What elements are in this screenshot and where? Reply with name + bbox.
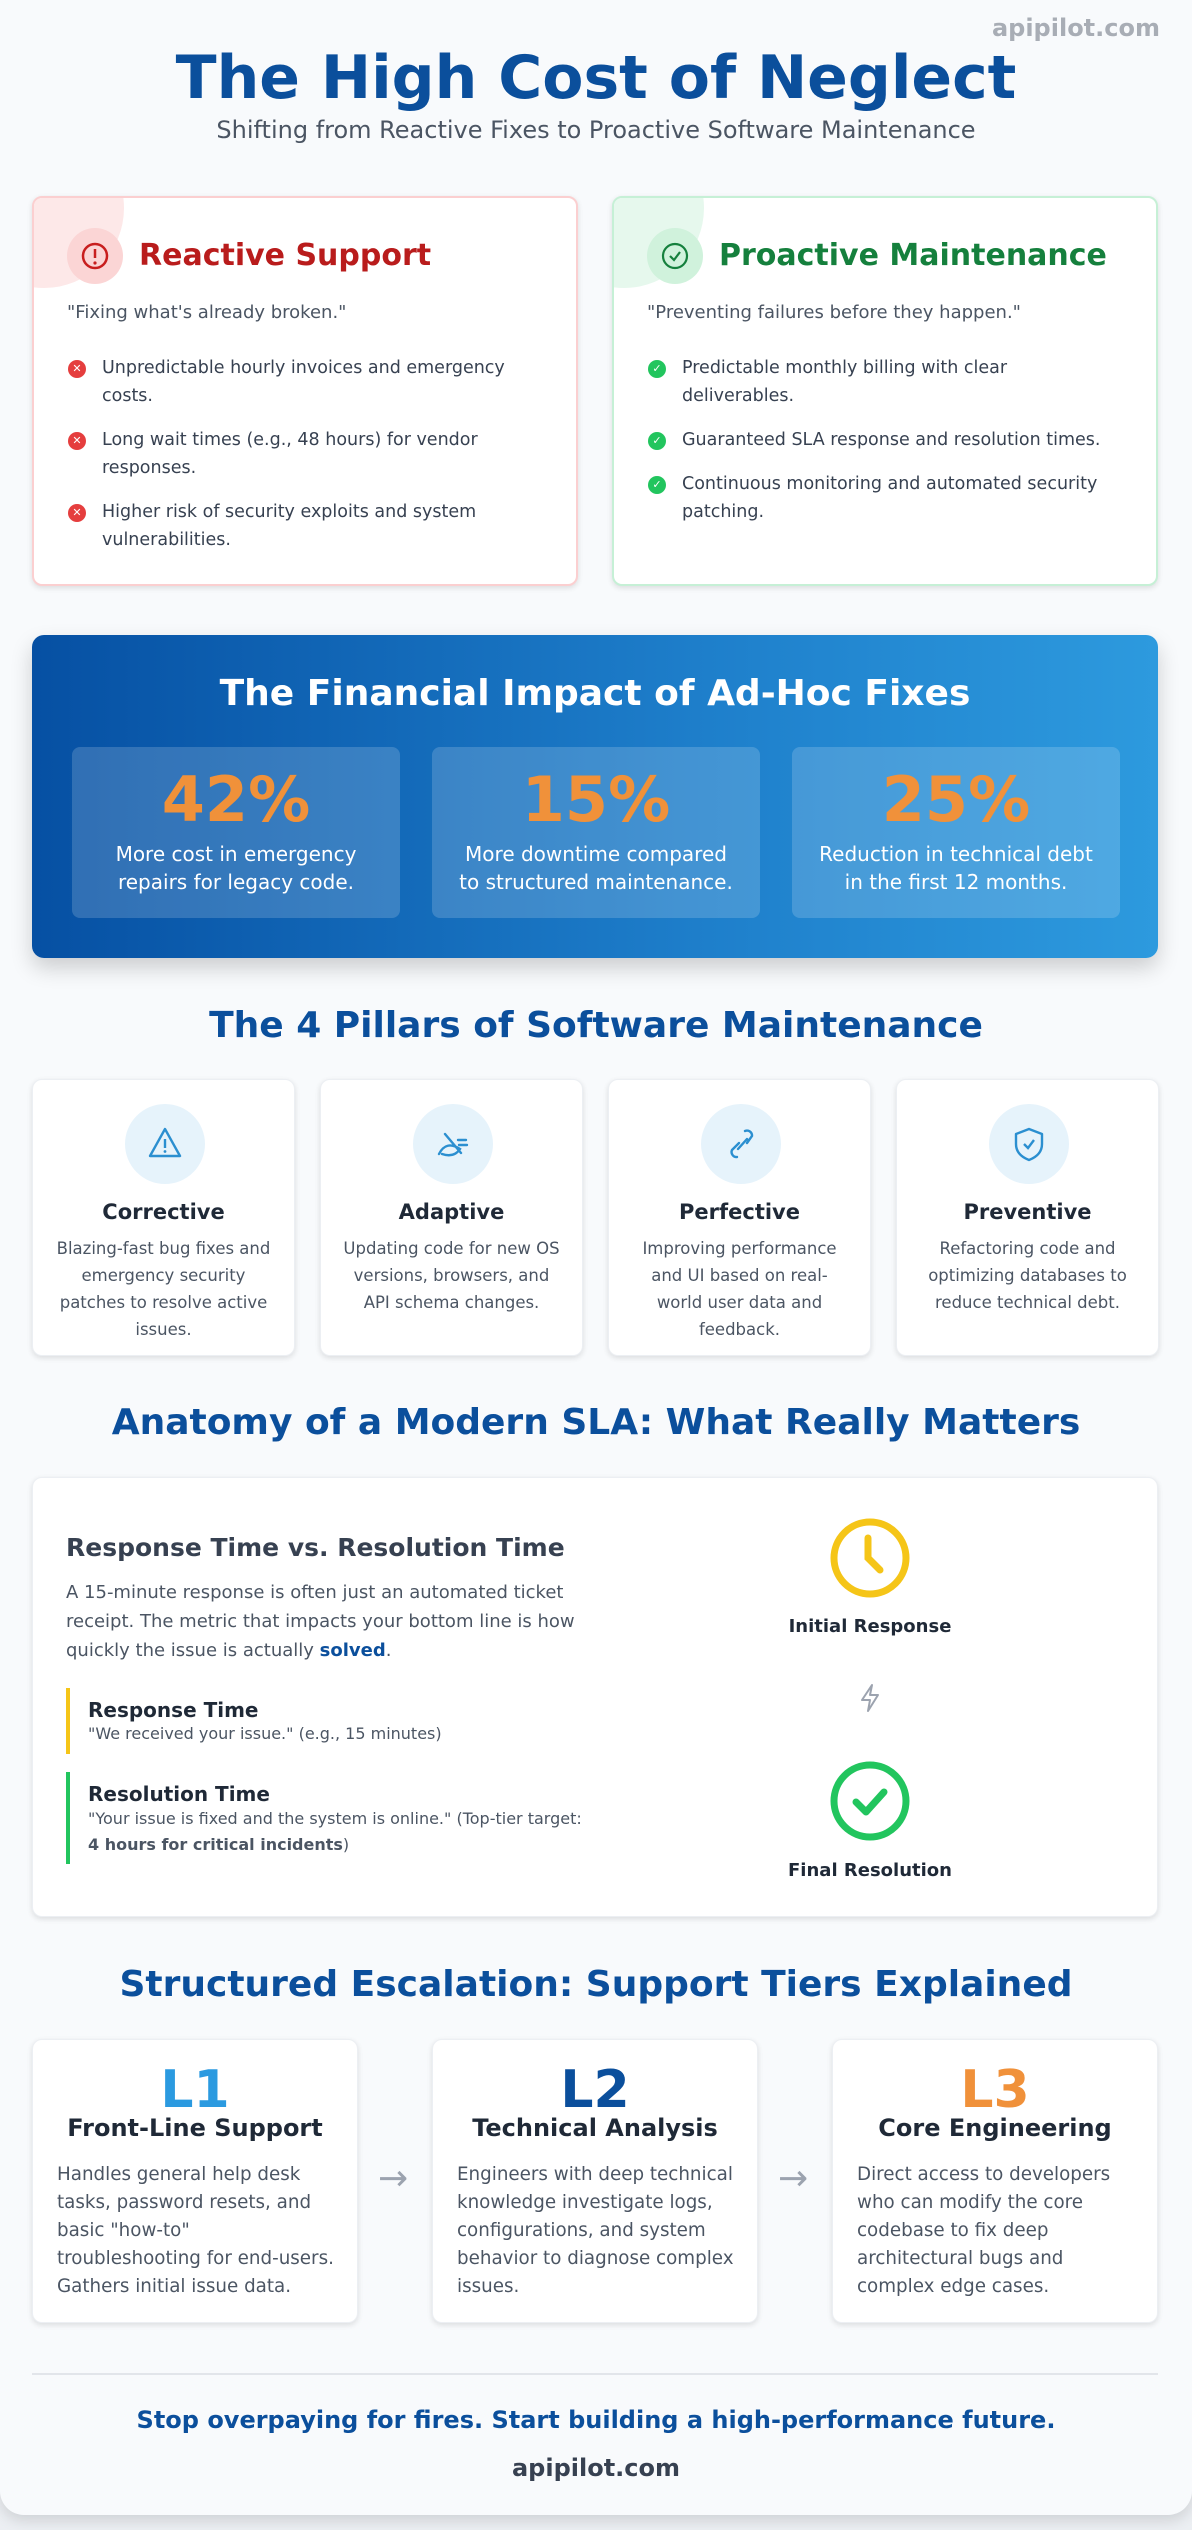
quote: "Preventing failures before they happen." xyxy=(647,302,1021,323)
stat: 15%: 15% xyxy=(522,763,670,836)
stat: 15% xyxy=(432,747,760,918)
stat: 42%: repairs for legacy code. xyxy=(118,870,354,894)
item: resolution time: "Your issue is fixed and the system is online." (Top-tier target: 4 hours for critical incidents) xyxy=(88,1809,582,1854)
pillar: preventive xyxy=(896,1079,1159,1356)
icon: check circle xyxy=(830,1762,910,1840)
item: resolution time xyxy=(66,1772,596,1864)
heading: The Financial Impact of Ad-Hoc Fixes xyxy=(220,673,970,714)
sub heading: Response Time vs. Resolution Time xyxy=(66,1533,565,1562)
item: response time xyxy=(66,1688,606,1754)
tier: L1: L1 xyxy=(160,2060,230,2120)
panel: reactive support xyxy=(32,196,578,586)
stat: 42%: 42% xyxy=(162,763,310,836)
item: response time: "We received your issue." (e.g., 15 minutes) xyxy=(88,1724,442,1743)
stat: 25%: 25% xyxy=(882,763,1030,836)
footer url: apipilot.com xyxy=(512,2454,680,2482)
arrow: → xyxy=(778,2158,808,2199)
paragraph: A 15-minute response is often just an automated ticket receipt. The metric that impacts your bottom line is how quickly the issue is actually solved. xyxy=(66,1582,575,1661)
panel: reactive support: Higher risk of security exploits and system vulnerabilities. xyxy=(102,502,476,550)
panel: financial impact xyxy=(32,635,1158,958)
panel: SLA card xyxy=(32,1477,1158,1917)
tier: L1: Front-Line Support xyxy=(67,2114,323,2142)
panel: reactive support: ✕ xyxy=(72,434,82,447)
quote: "Fixing what's already broken." xyxy=(67,302,346,323)
bullets: Predictable monthly billing with clear deliverables. xyxy=(682,358,1007,406)
item: resolution time: Resolution Time xyxy=(88,1782,270,1806)
icon: adapt xyxy=(413,1104,493,1184)
pillar: perfective: Perfective xyxy=(679,1200,800,1224)
pillar: preventive: Preventive xyxy=(963,1200,1092,1224)
heading: Reactive Support xyxy=(139,238,431,273)
panel: reactive support: ✕ xyxy=(72,506,82,519)
icon: warning xyxy=(125,1104,205,1184)
panel: proactive maintenance: ✓ xyxy=(652,434,662,447)
stat: 42% xyxy=(72,747,400,918)
arrow: → xyxy=(378,2158,408,2199)
tier: L1: Handles general help desk tasks, password resets, and basic "how-to" troubleshooting for end-users. Gathers initial issue data. xyxy=(57,2164,334,2297)
panel: proactive maintenance: Continuous monitoring and automated security patching. xyxy=(682,474,1097,522)
bullets: Unpredictable hourly invoices and emergency costs. xyxy=(102,358,505,406)
pillar: adaptive: Updating code for new OS versions, browsers, and API schema changes. xyxy=(343,1239,560,1312)
stat: 15%: to structured maintenance. xyxy=(459,870,733,894)
icon: clock xyxy=(830,1518,910,1598)
panel: proactive maintenance xyxy=(612,196,1158,586)
pillar: preventive: Refactoring code and optimizing databases to reduce technical debt. xyxy=(928,1239,1127,1312)
stat: 15%: More downtime compared xyxy=(465,842,727,866)
panel: proactive maintenance: ✓ xyxy=(652,362,662,375)
tier: L2 xyxy=(432,2039,758,2323)
panel: reactive support: ✕ xyxy=(72,362,82,375)
icon: shield xyxy=(989,1104,1069,1184)
pillar: corrective xyxy=(32,1079,295,1356)
icon: bolt xyxy=(861,1684,879,1712)
tier: L3: L3 xyxy=(960,2060,1030,2120)
stat: 25%: in the first 12 months. xyxy=(845,870,1067,894)
pillar: perfective: Improving performance and UI based on real-world user data and feedback. xyxy=(642,1239,837,1339)
pillar: perfective xyxy=(608,1079,871,1356)
tier: L1 xyxy=(32,2039,358,2323)
tier: L3: Direct access to developers who can modify the core codebase to fix deep architectural bugs and complex edge cases. xyxy=(857,2164,1110,2297)
panel: reactive support: Long wait times (e.g., 48 hours) for vendor responses. xyxy=(102,430,478,478)
title: The High Cost of Neglect xyxy=(176,43,1016,113)
pillar: corrective: Blazing-fast bug fixes and emergency security patches to resolve active issues. xyxy=(57,1239,270,1339)
panel: proactive maintenance: ✓ xyxy=(652,478,662,491)
tier: L2: Engineers with deep technical knowledge investigate logs, configurations, and system behavior to diagnose complex issues. xyxy=(457,2164,734,2297)
stat: 25%: Reduction in technical debt xyxy=(819,842,1093,866)
pillar: adaptive: Adaptive xyxy=(399,1200,504,1224)
heading: pillars: The 4 Pillars of Software Maintenance xyxy=(209,1005,983,1046)
pillar: adaptive xyxy=(320,1079,583,1356)
subtitle: Shifting from Reactive Fixes to Proactive Software Maintenance xyxy=(216,116,976,144)
icon: check xyxy=(647,228,703,284)
panel: proactive maintenance: Guaranteed SLA response and resolution times. xyxy=(682,430,1100,450)
heading: Proactive Maintenance xyxy=(719,238,1107,273)
heading: SLA: Anatomy of a Modern SLA: What Really Matters xyxy=(112,1402,1080,1443)
heading: tiers: Structured Escalation: Support Tiers Explained xyxy=(119,1964,1072,2005)
label: final resolution: Final Resolution xyxy=(788,1860,952,1881)
stat: 25% xyxy=(792,747,1120,918)
pillar: corrective: Corrective xyxy=(102,1200,225,1224)
brand watermark: apipilot.com xyxy=(992,14,1160,42)
item: response time: Response Time xyxy=(88,1698,258,1722)
icon: alert xyxy=(67,228,123,284)
tier: L3: Core Engineering xyxy=(878,2114,1112,2142)
tier: L2: L2 xyxy=(560,2060,630,2120)
icon: link xyxy=(701,1104,781,1184)
label: initial response: Initial Response xyxy=(789,1616,951,1637)
call to action: Stop overpaying for fires. Start building a high-performance future. xyxy=(137,2406,1055,2434)
tier: L2: Technical Analysis xyxy=(472,2114,718,2142)
tier: L3 xyxy=(832,2039,1158,2323)
stat: 42%: More cost in emergency xyxy=(116,842,356,866)
